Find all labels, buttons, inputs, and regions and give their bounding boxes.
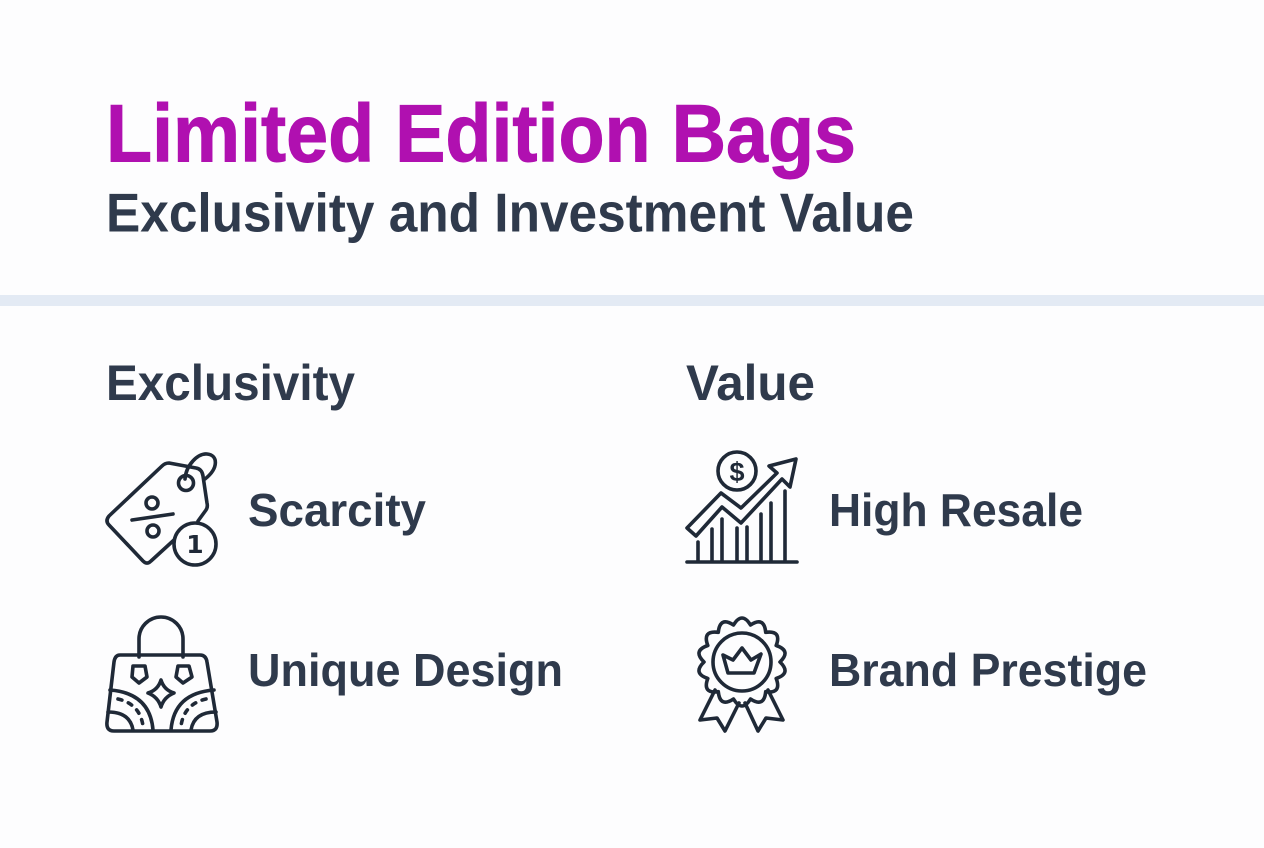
icon: rising chart with coin: $: [729, 457, 745, 487]
panel: value: [686, 355, 1147, 731]
icon: rising chart with coin: [687, 452, 797, 562]
title: Limited Edition Bags: [106, 88, 856, 180]
label: brand prestige: Brand Prestige: [829, 644, 1147, 696]
panel: exclusivity: [106, 355, 563, 731]
icon: prestige rosette: [699, 618, 785, 731]
subtitle: Exclusivity and Investment Value: [106, 182, 914, 244]
label: high resale: High Resale: [829, 484, 1083, 536]
label: scarcity: Scarcity: [248, 484, 426, 536]
icon: price tag: 1: [186, 530, 204, 559]
label: unique design: Unique Design: [248, 644, 563, 696]
icon: handbag: [107, 617, 217, 731]
icon: price tag: [107, 454, 216, 565]
heading: value: Value: [686, 355, 815, 411]
heading: exclusivity: Exclusivity: [106, 355, 355, 411]
